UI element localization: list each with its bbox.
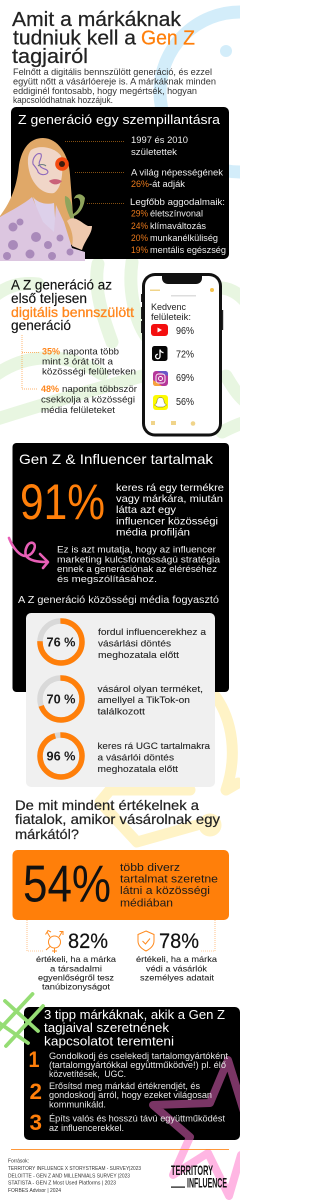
row: YouTube 96%: 96% <box>176 326 194 337</box>
stat: 48%: naponta többször <box>62 383 137 394</box>
text: 54%: médiában <box>120 898 173 910</box>
fact: top concerns: 29% <box>131 208 148 218</box>
tip 3: 3 <box>30 1110 42 1135</box>
row: Snapchat 56%: 56% <box>176 397 194 408</box>
text: influencer marketing: és megszólításához. <box>57 574 157 584</box>
text: 70%: találkozott <box>98 707 145 718</box>
heading: what young people value <box>15 798 220 842</box>
text: 78%: személyes adatait <box>140 973 215 983</box>
fact: top concerns: mentális egészség <box>150 244 226 255</box>
fact: top concerns: Legfőbb aggodalmaik: <box>130 196 225 207</box>
decoration: green hash <box>0 994 43 1046</box>
sources <box>8 1159 141 1194</box>
title: Gen Z <box>141 26 195 50</box>
tip 2: gondoskodj arról, hogy ezeket világosan <box>49 1090 212 1100</box>
big stat: 91%: 91% <box>20 474 105 530</box>
row: TikTok 72%: 72% <box>176 350 194 361</box>
decoration: pink star <box>173 1137 241 1196</box>
text: 82% <box>36 954 116 992</box>
row: Instagram 69% <box>153 371 194 386</box>
text: 54% <box>120 862 218 910</box>
title: Amit a márkáknak <box>12 8 182 31</box>
tip 3: Építs valós és hosszú távú együttműködést <box>49 1114 225 1124</box>
tip 1: 1 <box>28 1047 40 1072</box>
heading: panel 3 <box>44 1007 225 1049</box>
tip 1 <box>28 1047 228 1079</box>
title <box>12 8 195 68</box>
panel: 3 tips <box>24 1007 240 1140</box>
tip 2 <box>30 1079 212 1110</box>
text: 82%: a társadalmi <box>50 964 102 974</box>
text: 91% explanation: média profilján <box>116 528 190 539</box>
heading: panel 3: 3 tipp márkáknak, akik a Gen Z <box>44 1007 225 1022</box>
text: influencer marketing <box>57 545 220 584</box>
background: yellow swoosh <box>100 697 238 842</box>
title: tudniuk kell a <box>13 26 137 50</box>
phone heading: felületeik: <box>151 311 191 322</box>
donut: 76% <box>40 621 82 663</box>
sources: FORBES Advisor | 2024 <box>8 1188 61 1194</box>
text: 82%: egyenlőségről tesz <box>38 973 114 983</box>
fact: top concerns: életszínvonal <box>150 208 203 218</box>
tip 2: Erősítsd meg márkád értékrendjét, és <box>49 1081 200 1091</box>
text: 96%: a vásárlói döntés <box>98 753 174 764</box>
stat: 35%: naponta több <box>63 345 119 356</box>
heading: panel 2: Gen Z & Influencer tartalmak <box>19 452 213 467</box>
sources: DELOITTE - GEN Z AND MILLENNIALS SURVEY |2023 <box>8 1173 130 1179</box>
icon: shield <box>138 931 154 951</box>
sources: Források: <box>8 1159 29 1165</box>
divider line <box>11 1148 229 1151</box>
fact: population share: -át adják <box>149 178 185 189</box>
donut: 70% <box>40 678 82 720</box>
text: 91% explanation: látta azt egy <box>116 505 177 516</box>
heading: what young people value: De mit mindent értékelnek a <box>15 798 199 813</box>
text: 54%: tartalmat szeretne <box>120 874 218 886</box>
fact: top concerns: 20% <box>131 232 148 243</box>
text: 70%: amellyel a TikTok-on <box>98 695 190 706</box>
stat: 78%: 78% <box>159 929 199 953</box>
background: blue smiley ring <box>160 12 320 172</box>
tip 2: 2 <box>30 1079 42 1104</box>
donut: 96%: 96 % <box>46 749 76 764</box>
text: 76%: fordul influencerekhez a <box>98 627 207 638</box>
tip 1: közvetítések, UGC. <box>49 1069 126 1079</box>
text: 78% <box>136 954 217 983</box>
row: Instagram 69%: 69% <box>176 373 194 384</box>
heading: first digital natives: A Z generáció az <box>11 278 112 292</box>
intro text: Felnőtt a digitális bennszülött generáció, és ezzel <box>13 67 212 77</box>
fact: top concerns <box>130 196 226 255</box>
heading: first digital natives: digitális bennszülött <box>11 305 134 320</box>
heading: what young people value: márkától? <box>15 827 79 842</box>
icon: gender symbols <box>46 930 63 953</box>
panel: Gen Z and influencer content <box>9 443 229 692</box>
text: 91% explanation: keres rá egy termékre <box>116 483 224 494</box>
fact: birth years <box>131 134 188 157</box>
text: 54%: több diverz <box>120 862 180 874</box>
text: 70% <box>98 684 203 718</box>
heading: first digital natives: generáció <box>11 318 71 333</box>
stat: 35%: 35% <box>42 345 61 356</box>
fact: population share: A világ népességének <box>131 166 223 178</box>
stat: 35%: mint 3 órát tölt a <box>42 356 114 366</box>
panel: donut stats <box>26 613 215 787</box>
stat: 48%: csekkolja a közösségi <box>41 394 135 405</box>
text: 78%: értékeli, ha a márka <box>136 954 217 964</box>
text: influencer marketing: marketing kulcsfontosságú stratégia <box>57 554 220 564</box>
fact: birth years: születettek <box>131 146 177 157</box>
panel: 54% <box>12 850 229 920</box>
fact: top concerns: munkanélküliség <box>150 232 218 243</box>
row: YouTube 96% <box>151 324 194 337</box>
tip 3 <box>30 1110 225 1135</box>
fact: birth years: 1997 és 2010 <box>131 134 188 145</box>
stat: 35%: közösségi felületeken <box>42 366 136 377</box>
background: green curls <box>0 262 246 432</box>
stat: 82%: 82% <box>68 929 108 953</box>
text: 96% <box>98 741 211 775</box>
text: influencer marketing: Ez is azt mutatja, hogy az influencer <box>57 545 216 555</box>
text: 76%: meghozatala előtt <box>98 650 179 661</box>
fact: top concerns: 24% <box>131 220 148 231</box>
text: 91% explanation <box>116 483 224 539</box>
phone status and toolbar <box>150 288 214 426</box>
intro text <box>13 67 216 105</box>
heading: what young people value: fiatalok, amikor vásárolnak egy <box>15 812 220 827</box>
arrow: pink curl <box>9 538 48 568</box>
star inside panel <box>149 1056 240 1140</box>
donut: 76%: 76 % <box>46 635 76 650</box>
phone mockup <box>141 273 223 436</box>
tip 3: az influencerekkel. <box>49 1123 124 1133</box>
donut: 70%: 70 % <box>46 692 76 707</box>
donut: 96% <box>40 735 82 777</box>
row: TikTok 72% <box>152 346 194 361</box>
tip 1: (tartalomgyártókkal együttműködve!) pl. élő <box>49 1060 226 1070</box>
tip 1: Gondolkodj és cselekedj tartalomgyártóként <box>49 1051 228 1061</box>
stat: 35% <box>42 345 136 377</box>
logo: Territory Influence <box>171 1162 227 1190</box>
stat: 48% <box>41 383 137 415</box>
tip 2: kommunikáld. <box>49 1100 106 1110</box>
intro text: eddiginél fontosabb, hogy megértsék, hogyan <box>13 86 197 96</box>
stat: 48%: 48% <box>41 383 60 394</box>
dotted connectors <box>27 920 215 951</box>
sources: TERRITORY INFLUENCE X STORYSTREAM - SURVEY|2023 <box>8 1166 141 1172</box>
text: 91% explanation: influencer közösségi <box>116 517 218 528</box>
fact: top concerns: klímaváltozás <box>150 220 206 231</box>
text: 91% explanation: vagy márkára, miután <box>116 494 223 505</box>
stat: 78% <box>136 929 217 983</box>
intro text: együtt nőtt a vásárlóereje is. A márkáknak minden <box>13 76 216 86</box>
fact: top concerns: 19% <box>131 244 148 255</box>
heading: panel 3: tagjaival szeretnének <box>44 1020 169 1035</box>
panel: Z generáció egy szempillantásra <box>0 107 229 261</box>
text: 54%: látni a közösségi <box>120 885 210 897</box>
text: 82%: tanúbizonyságot <box>42 982 111 992</box>
text: influencer marketing: ennek a generációnak az eléréséhez <box>57 564 218 574</box>
text: 96%: keres rá UGC tartalmakra <box>98 741 211 752</box>
heading: panel 3: kapcsolatot teremteni <box>44 1034 174 1049</box>
heading: first digital natives <box>11 278 134 333</box>
text: 76%: vásárlási döntés <box>98 639 171 650</box>
stat: 48%: média felületeket <box>41 404 115 415</box>
title: tagjairól <box>12 45 88 68</box>
dotted leader lines <box>65 142 125 204</box>
text: 78%: védi a vásárlók <box>146 964 208 974</box>
phone heading <box>151 301 191 322</box>
text: 96%: meghozatala előtt <box>98 764 178 775</box>
subheading: social media consumer: A Z generáció közösségi média fogyasztó <box>18 595 220 606</box>
text: 76% <box>98 627 207 661</box>
row: Snapchat 56% <box>153 395 194 410</box>
text: 70%: vásárol olyan terméket, <box>98 684 203 695</box>
dotted bracket <box>22 335 39 389</box>
heading: panel 1: Z generáció egy szempillantásra <box>18 112 221 127</box>
photo: woman with flower <box>0 138 92 261</box>
fact: population share <box>131 166 223 189</box>
heading: first digital natives: első teljesen <box>11 291 87 306</box>
big stat: 54%: 54% <box>23 856 111 914</box>
fact: population share: 26% <box>131 178 149 189</box>
text: 82%: értékeli, ha a márka <box>36 954 116 964</box>
stat: 82% <box>36 929 116 992</box>
phone heading: Kedvenc <box>151 301 186 312</box>
sources: STATISTA - GEN Z Most Used Platforms | 2023 <box>8 1181 116 1187</box>
intro text: kapcsolódhatnak hozzájuk. <box>13 95 113 105</box>
